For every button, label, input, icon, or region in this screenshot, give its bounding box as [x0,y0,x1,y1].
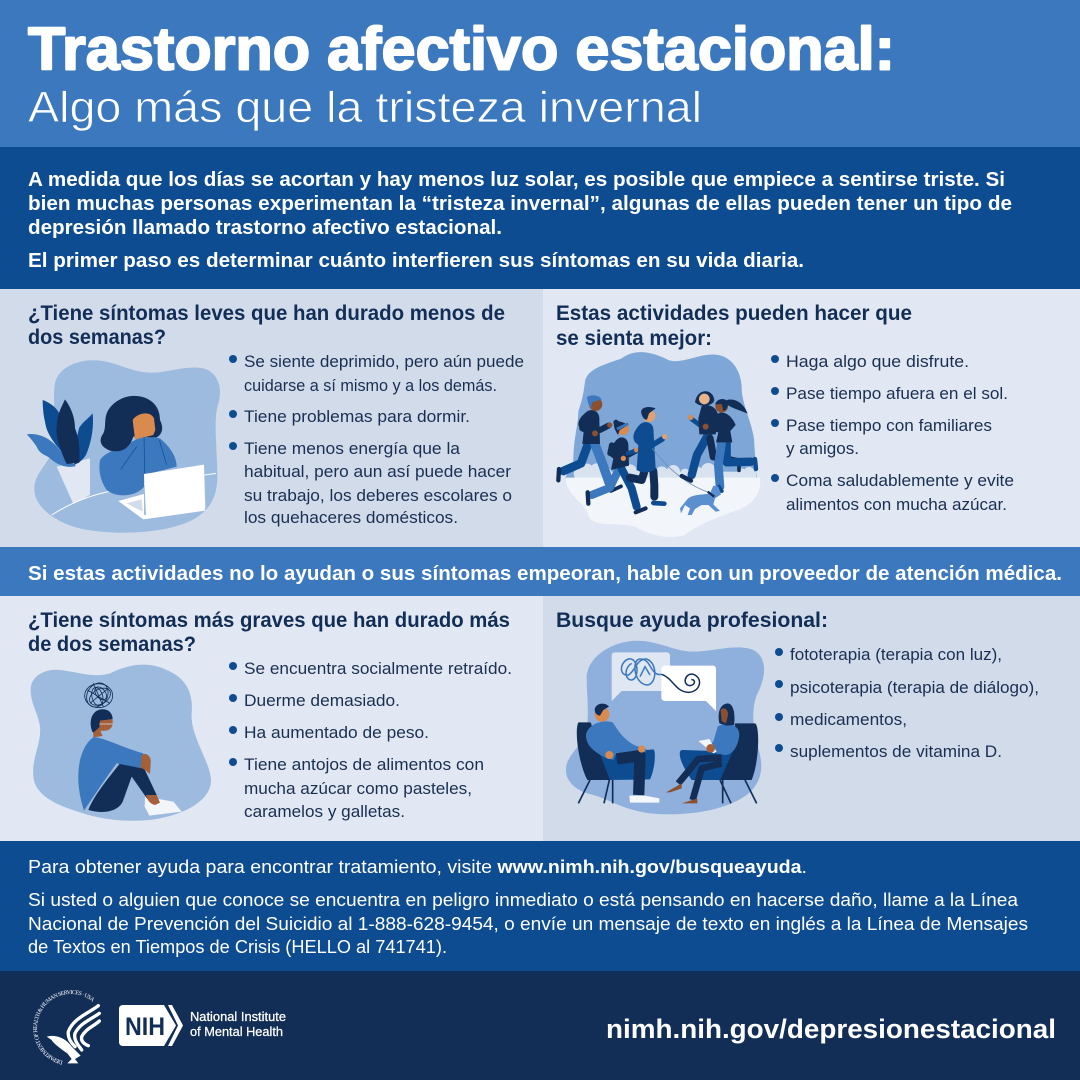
list: severe symptoms: Se encuentra socialmente retraído. [244,659,512,678]
list: severe symptoms [229,659,512,821]
panel: footer [0,971,1080,1080]
subtitle: Algo más que la tristeza invernal [28,83,702,132]
panel: help resources: Para obtener ayuda para encontrar tratamiento, visite www.nimh.nih.gov/busqueayuda . [28,857,807,877]
heading: mild symptoms: ¿Tiene síntomas leves que han durado menos de [28,302,505,325]
chair left [577,722,611,780]
illustration: people jogging with dog [558,352,760,537]
list: severe symptoms: Tiene antojos de alimentos con [244,755,484,774]
panel: severe symptoms [0,596,543,841]
illustration: therapy session [566,641,764,814]
list: mild symptoms: su trabajo, los deberes escolares o [244,486,512,505]
chair right [720,723,758,780]
list: severe symptoms: Duerme demasiado. [244,691,400,710]
list: severe symptoms: caramelos y galletas. [244,802,405,821]
therapist [707,724,739,755]
heading: mild symptoms: dos semanas? [28,326,166,349]
panel: help resources [0,841,1080,971]
heading: severe symptoms: ¿Tiene síntomas más graves que han durado más [28,609,510,632]
dog [680,486,721,515]
logo text: National Institute of Mental Health: of Mental Health [190,1025,283,1039]
heading: severe symptoms [28,609,510,656]
panel: introduction: depresión llamado trastorno afectivo estacional. [28,217,502,239]
list: activities: alimentos con mucha azúcar. [786,495,1007,514]
list: severe symptoms: mucha azúcar como pasteles, [244,779,472,798]
list: treatments: fototerapia (terapia con luz), [790,645,1002,664]
list: mild symptoms: habitual, pero aun así puede hacer [244,462,511,481]
runner 4 [682,412,739,481]
panel: introduction: bien muchas personas experimentan la “tristeza invernal”, algunas de ellas pueden tener un tipo de [28,193,1012,215]
heading: severe symptoms: de dos semanas? [28,633,196,656]
list: mild symptoms: Tiene menos energía que la [244,439,461,458]
runner 2 [588,445,646,512]
panel: header [0,0,1080,147]
heading: activities [556,302,912,350]
heading: mild symptoms [28,302,505,349]
heading: activities: se sienta mejor: [556,327,712,350]
list: mild symptoms [229,352,524,527]
list: treatments: medicamentos, [790,710,907,729]
panel: introduction: A medida que los días se acortan y hay menos luz solar, es posible que empiece a sentirse triste. Si [28,169,1005,191]
panel: introduction: El primer paso es determinar cuánto interfieren sus síntomas en su vida diaria. [28,250,804,272]
banner: talk to a provider: Si estas actividades no lo ayudan o sus síntomas empeoran, hable con un proveedor de atención médica. [28,563,1062,585]
list: mild symptoms: Tiene problemas para dormir. [244,407,470,426]
panel: professional help [543,596,1080,841]
panel: mild symptoms [0,289,543,547]
list: activities: Haga algo que disfrute. [786,352,969,371]
heading: activities: Estas actividades pueden hacer que [556,302,912,325]
list: mild symptoms: los quehaceres domésticos. [244,508,458,527]
list: treatments: suplementos de vitamina D. [790,742,1002,761]
man [586,721,647,760]
illustration: seated withdrawn person [31,665,211,821]
runner 5 [718,442,756,491]
list: treatments [775,645,1039,761]
panel: help resources: de Textos en Tiempos de Crisis (HELLO al 741741). [28,937,447,957]
panel: introduction [0,147,1080,289]
list: activities: Coma saludablemente y evite [786,471,1014,490]
list: activities [771,352,1014,514]
logo: HHS seal: DEPARTMENT OF HEALTH & HUMAN SERVICES · USA [33,990,94,1065]
logo text: National Institute of Mental Health [190,1010,286,1039]
list: severe symptoms: Ha aumentado de peso. [244,723,429,742]
list: activities: Pase tiempo afuera en el sol. [786,384,1008,403]
banner: talk to a provider [0,547,1080,596]
url: nimh.nih.gov/depresionestacional [606,1014,1056,1044]
panel: help resources: Si usted o alguien que conoce se encuentra en peligro inmediato o está pensando en hacerse daño, llame a la Línea [28,890,1019,910]
title: Trastorno afectivo estacional: [28,16,895,82]
runner 1 [558,420,621,491]
list: activities: Pase tiempo con familiares [786,416,992,435]
logo: NIH [119,1005,183,1046]
illustration: woman at laptop with plant [27,360,220,533]
heading: professional help: Busque ayuda profesional: [556,609,828,632]
list: mild symptoms: cuidarse a sí mismo y a los demás. [244,376,497,395]
list: treatments: psicoterapia (terapia de diálogo), [790,678,1039,697]
list: mild symptoms: Se siente deprimido, pero aún puede [244,352,524,371]
logo: NIH: NIH [125,1013,165,1041]
panel: helpful activities [543,289,1080,547]
list: activities: y amigos. [786,439,859,458]
logo text: National Institute of Mental Health: National Institute [190,1010,286,1024]
panel: help resources: Nacional de Prevención del Suicidio al 1-888-628-9454, o envíe un mensaje de texto en inglés a la Línea de Mensajes [28,914,1028,934]
runner 3 [630,439,664,504]
